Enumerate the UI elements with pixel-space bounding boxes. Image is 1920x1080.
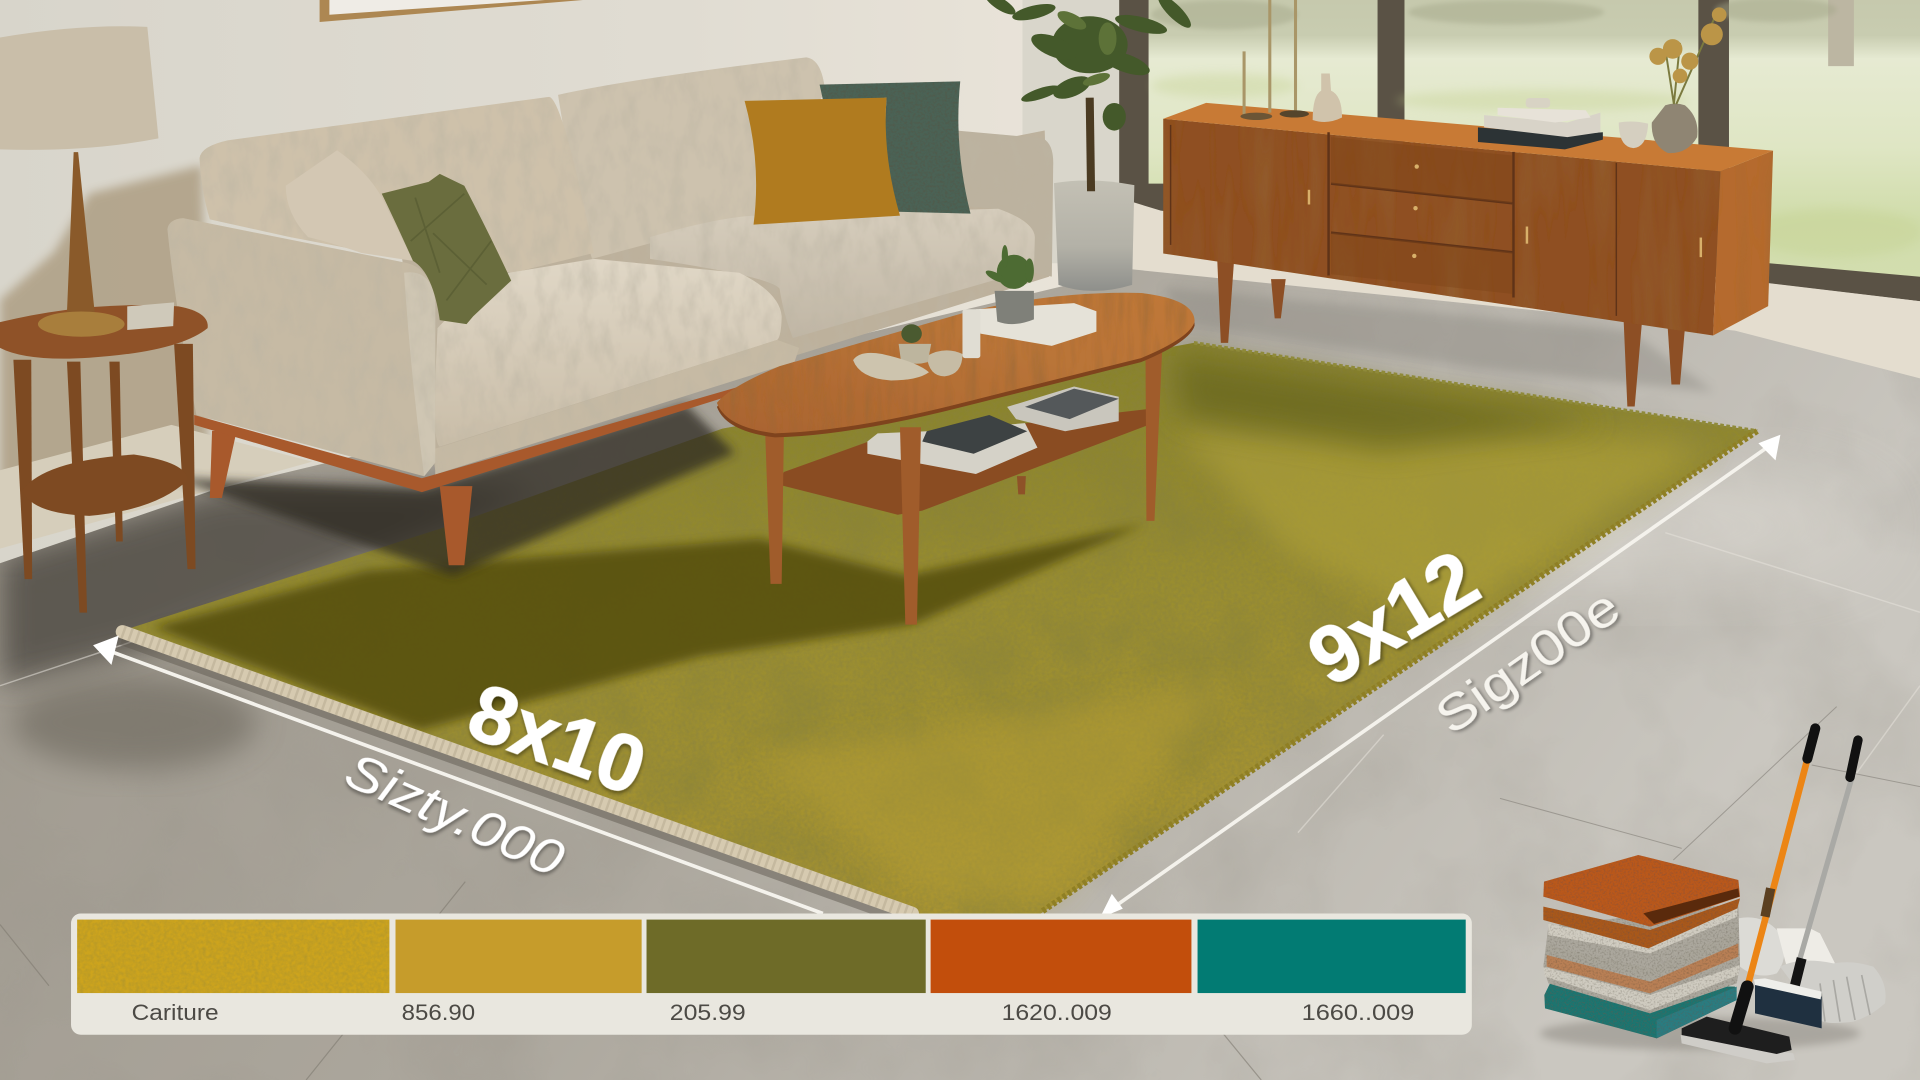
potted plant xyxy=(984,245,1034,324)
brush head xyxy=(1681,1017,1795,1063)
small succulent pot xyxy=(899,324,931,364)
swatch 1 xyxy=(77,920,389,993)
orange towels xyxy=(1543,898,1740,948)
table legs xyxy=(765,352,1162,625)
shell dish right xyxy=(927,350,962,376)
seat cushion right xyxy=(650,209,1035,338)
planter xyxy=(1054,180,1134,291)
corner pillar xyxy=(1022,0,1120,263)
shell dish left xyxy=(853,353,929,380)
side table xyxy=(0,26,208,613)
dark bucket brush xyxy=(1754,978,1822,1028)
label: size right: Sigz00e xyxy=(1425,578,1630,745)
pillow: cream xyxy=(286,150,413,261)
orange mop handle xyxy=(1735,728,1815,1028)
window with garden view xyxy=(1119,0,1920,301)
table legs xyxy=(13,344,196,613)
sofa body xyxy=(167,57,1053,476)
picture frame xyxy=(320,0,583,22)
vase with flowers xyxy=(1649,7,1727,153)
towel stack xyxy=(1543,855,1740,1038)
table top xyxy=(717,293,1195,433)
glass bottle xyxy=(962,309,980,358)
sofa front base xyxy=(435,340,799,474)
dimension arrow: 8x10 side xyxy=(93,636,823,913)
table top xyxy=(0,305,208,359)
pillow: mustard xyxy=(745,98,900,225)
swatch labels: 205.99 xyxy=(670,1000,746,1025)
sideboard doors and drawers xyxy=(1171,125,1616,316)
shelf books lower xyxy=(867,415,1037,474)
white mop heads xyxy=(1738,917,1886,1023)
left baseboard xyxy=(0,425,312,549)
rug xyxy=(122,343,1757,921)
silver mop handle xyxy=(1795,740,1858,985)
seat cushion left xyxy=(435,259,782,447)
rug table shadow xyxy=(153,524,1145,730)
swatch labels xyxy=(132,1000,1414,1025)
swatch 2 xyxy=(396,920,642,993)
wall background xyxy=(0,0,1920,576)
sideboard legs xyxy=(1217,257,1685,407)
cleaning supplies group xyxy=(1500,707,1920,1063)
leaves xyxy=(982,0,1195,131)
trunk xyxy=(1090,98,1091,191)
table shelf xyxy=(22,455,188,516)
back cushion right xyxy=(558,57,825,259)
right armrest xyxy=(956,130,1053,277)
rug lower sunlit area xyxy=(759,686,1224,900)
sofa back fill xyxy=(402,130,1049,470)
table back leg xyxy=(1017,476,1026,494)
label: 8x10: 8x10 xyxy=(457,667,657,813)
small box on table xyxy=(127,302,174,330)
sideboard front xyxy=(1163,119,1720,336)
cup xyxy=(1619,121,1648,148)
table top edge xyxy=(717,297,1195,437)
dimension arrow: 9x12 side xyxy=(1100,435,1780,918)
sideboard top xyxy=(1163,103,1773,171)
distant bushes xyxy=(1151,0,1837,29)
swatch labels: 1620..009 xyxy=(1002,1000,1112,1025)
teal towels xyxy=(1544,983,1737,1038)
rug sunlit band xyxy=(1176,429,1714,624)
pillow: sage green xyxy=(820,81,971,214)
decor on sideboard xyxy=(1240,0,1727,153)
rug right edge xyxy=(1041,431,1757,912)
coffee table xyxy=(717,245,1195,625)
swatch 4 xyxy=(931,920,1191,993)
back cushion left xyxy=(200,97,594,273)
tree trunk outside xyxy=(1828,0,1854,66)
lamp xyxy=(0,26,158,337)
floor plant xyxy=(982,0,1195,291)
gray towels xyxy=(1543,903,1740,1013)
left armrest xyxy=(167,218,435,476)
swatch 5 xyxy=(1198,920,1466,993)
table shelf xyxy=(777,409,1149,515)
floor xyxy=(0,269,1920,1080)
grass patches xyxy=(1151,73,1920,257)
colour palette panel xyxy=(71,913,1472,1035)
pillow: olive quilted xyxy=(382,174,511,324)
label: 9x12: 9x12 xyxy=(1293,533,1494,703)
wall shadow behind lamp and sofa xyxy=(0,165,208,514)
swatch 3 xyxy=(647,920,926,993)
items on table xyxy=(853,245,1096,380)
sideboard xyxy=(1163,0,1773,407)
swatch labels: Cariture xyxy=(132,1000,219,1025)
shelf books upper xyxy=(1007,387,1119,431)
sideboard side xyxy=(1713,151,1773,336)
book stack xyxy=(1478,98,1603,149)
swatch labels: 856.90 xyxy=(402,1000,475,1025)
swatch labels: 1660..009 xyxy=(1302,1000,1414,1025)
towel fold shadow xyxy=(1643,888,1739,924)
rug fringe xyxy=(122,632,912,921)
tile joints xyxy=(1500,707,1920,860)
label: size left: Sizty.000 xyxy=(337,742,572,887)
rug shade top right xyxy=(1176,355,1604,451)
sofa legs and rail xyxy=(194,362,795,565)
soft floor shadow xyxy=(1540,1017,1860,1050)
book pair xyxy=(976,303,1096,346)
window sill and baseboard xyxy=(1133,202,1920,380)
rug top edge xyxy=(1194,343,1757,431)
sofa under-shadow xyxy=(171,404,735,576)
floor mottling and shadows xyxy=(0,269,1920,1080)
